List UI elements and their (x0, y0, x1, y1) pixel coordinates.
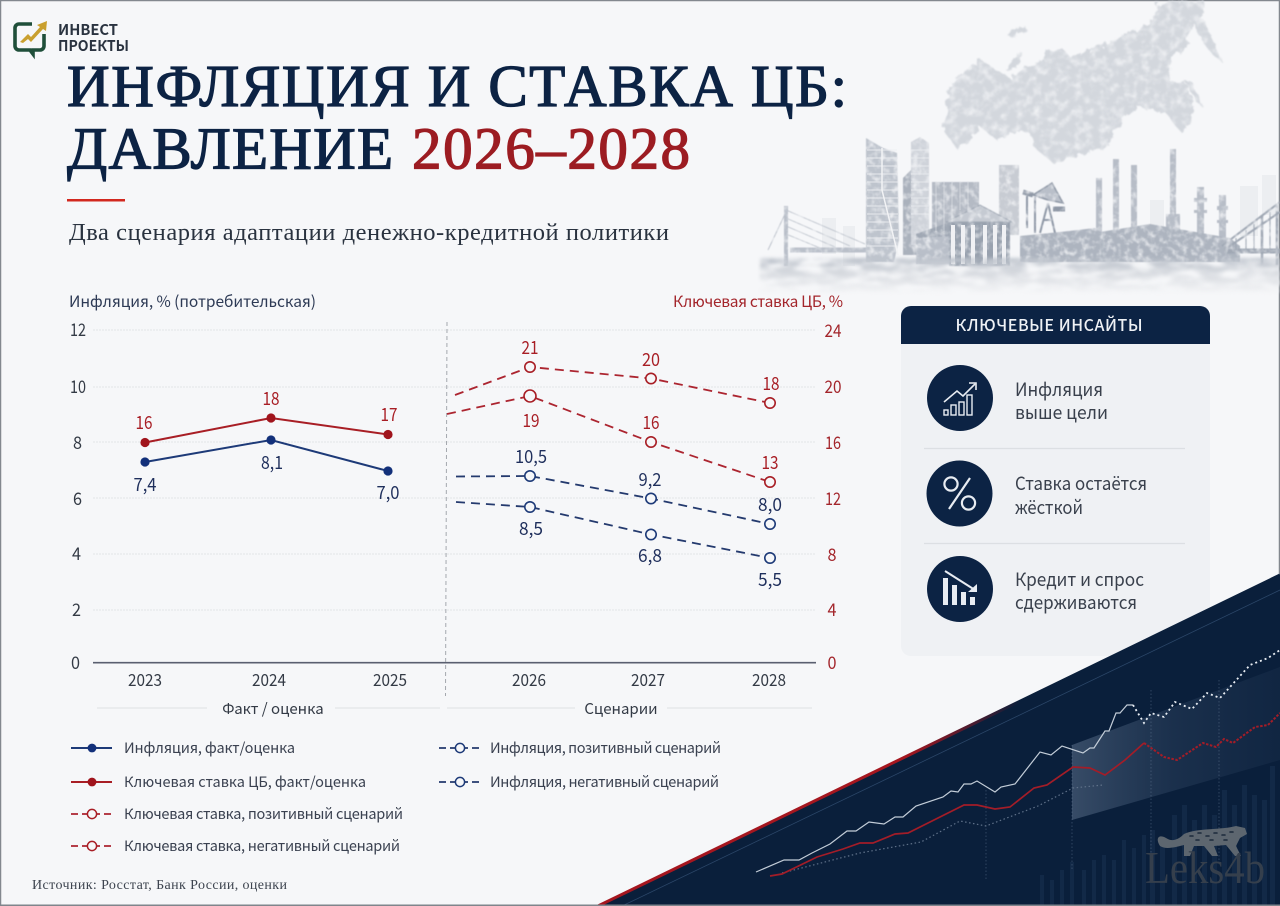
line: inflation negative scenario (456, 502, 770, 558)
data labels: key rate: 18 (762, 370, 780, 396)
data labels: key rate: 13 (762, 449, 778, 475)
chart line: grey lower (782, 785, 1103, 873)
chart: inflation and key rate (69, 290, 843, 719)
data labels: inflation: 8,0 (758, 491, 782, 517)
chart line: white (756, 650, 1280, 872)
logo text: ПРОЕКТЫ (58, 35, 129, 56)
bank building (916, 234, 952, 264)
logo text (58, 19, 129, 56)
insight: rate stays tight: жёсткой (1015, 494, 1083, 520)
right axis labels: 24 (824, 318, 842, 343)
left axis labels: 10 (70, 374, 86, 399)
ground fog (760, 258, 1280, 292)
line: key rate negative scenario (447, 396, 770, 482)
data labels: key rate: 20 (642, 346, 660, 372)
title underline (67, 199, 125, 202)
legend: inflation negative: Инфляция, негативный сценарий (490, 771, 719, 792)
year labels: 2027 (631, 667, 665, 691)
building details (867, 148, 1004, 264)
logo text: ИНВЕСТ (58, 19, 118, 40)
source note: Источник: Росстат, Банк России, оценки (32, 878, 288, 893)
left axis labels: 2 (72, 597, 81, 622)
left axis labels: 4 (72, 541, 81, 566)
chart line: red (770, 713, 1280, 876)
line: inflation positive scenario (456, 476, 770, 524)
year labels (128, 667, 786, 691)
title: 2026–2028 (412, 116, 690, 182)
data labels: inflation: 6,8 (638, 542, 662, 568)
right axis labels (824, 318, 842, 675)
right axis labels: 12 (825, 486, 841, 511)
refinery (1096, 149, 1228, 245)
data labels: inflation: 9,2 (638, 466, 662, 492)
data labels: key rate: 16 (642, 409, 660, 435)
year labels: 2024 (252, 667, 286, 691)
right bridge (1222, 202, 1280, 265)
data labels: key rate: 19 (522, 407, 540, 433)
insight: credit and demand restrained: Кредит и спрос (1015, 566, 1144, 592)
right axis labels: 4 (828, 597, 837, 622)
panel header: КЛЮЧЕВЫЕ ИНСАЙТЫ (956, 312, 1142, 336)
period labels: Факт / оценка (222, 698, 324, 719)
watermark: leopard (1158, 826, 1247, 856)
bottom border (0, 904, 1280, 906)
title: ИНФЛЯЦИЯ И СТАВКА ЦБ: (67, 53, 847, 119)
year labels: 2028 (752, 667, 786, 691)
logo (15, 19, 129, 56)
insight: credit and demand restrained: сдерживаются (1015, 589, 1137, 615)
right axis labels: 8 (828, 542, 836, 567)
data labels: inflation: 8,1 (261, 449, 283, 475)
legend: key rate positive: Ключевая ставка, позитивный сценарий (124, 803, 403, 824)
illustration: map of Russia and skyline (760, 0, 1280, 292)
insight: rate stays tight: Ставка остаётся (1015, 470, 1147, 496)
watermark: text: Leks4b (1145, 842, 1265, 893)
data labels: inflation: 7,0 (376, 479, 400, 505)
period labels (97, 698, 812, 719)
insight: inflation above target: выше цели (1015, 399, 1108, 425)
data labels: key rate: 16 (136, 409, 153, 435)
legend (71, 737, 721, 856)
data labels: inflation: 10,5 (515, 443, 547, 469)
insight: credit and demand restrained (927, 556, 1144, 622)
axis title: inflation: Инфляция, % (потребительская) (69, 290, 316, 312)
Evolution tower (866, 138, 899, 262)
data labels: key rate: 21 (522, 334, 538, 360)
left axis labels (70, 317, 86, 675)
year labels: 2026 (512, 667, 546, 691)
axis title: key rate: Ключевая ставка ЦБ, % (673, 290, 843, 312)
line: key rate positive scenario (455, 367, 770, 403)
left bridge (768, 206, 866, 266)
left axis labels: 8 (73, 430, 82, 455)
data labels: key rate: 17 (380, 401, 398, 427)
right axis labels: 16 (825, 430, 841, 455)
data labels: key rate: 18 (262, 385, 280, 411)
left axis labels: 6 (73, 486, 82, 511)
insight: inflation above target: Инфляция (1015, 376, 1103, 402)
skyline (768, 137, 1280, 266)
left axis labels: 12 (70, 317, 86, 342)
distant haze buildings (822, 175, 1276, 266)
towers (903, 169, 921, 255)
map of Russia (943, 0, 1223, 162)
legend: inflation positive: Инфляция, позитивный сценарий (490, 737, 721, 758)
title: ДАВЛЕНИЕ (67, 116, 393, 182)
year labels: 2025 (373, 667, 407, 691)
insight: rate stays tight (926, 460, 1147, 526)
legend: key rate actual: Ключевая ставка ЦБ, факт/оценка (124, 771, 366, 792)
decorative dark corner with market chart (598, 575, 1280, 906)
data labels: inflation: 5,5 (758, 566, 782, 592)
period labels: Сценарии (584, 698, 658, 719)
right axis labels: 0 (828, 650, 836, 675)
logo mark (15, 21, 47, 54)
line: inflation actual (140, 435, 393, 476)
panel: key insights (901, 306, 1210, 656)
subtitle: Два сценария адаптации денежно-кредитной политики (69, 219, 669, 246)
data labels: key rate (136, 334, 780, 475)
scenario markers (524, 362, 775, 563)
legend: key rate negative: Ключевая ставка, негативный сценарий (124, 835, 400, 856)
data labels: inflation: 8,5 (519, 515, 543, 541)
pump jack (1023, 183, 1065, 233)
panel header (901, 306, 1210, 344)
left axis labels: 0 (71, 650, 80, 675)
title (67, 53, 847, 182)
data labels: inflation (134, 443, 782, 592)
line: key rate actual (140, 413, 393, 447)
data labels: inflation: 7,4 (134, 471, 157, 497)
right axis labels: 20 (824, 374, 842, 399)
legend: inflation actual: Инфляция, факт/оценка (124, 737, 295, 758)
insight: inflation above target (927, 365, 1108, 431)
year labels: 2023 (128, 667, 162, 691)
